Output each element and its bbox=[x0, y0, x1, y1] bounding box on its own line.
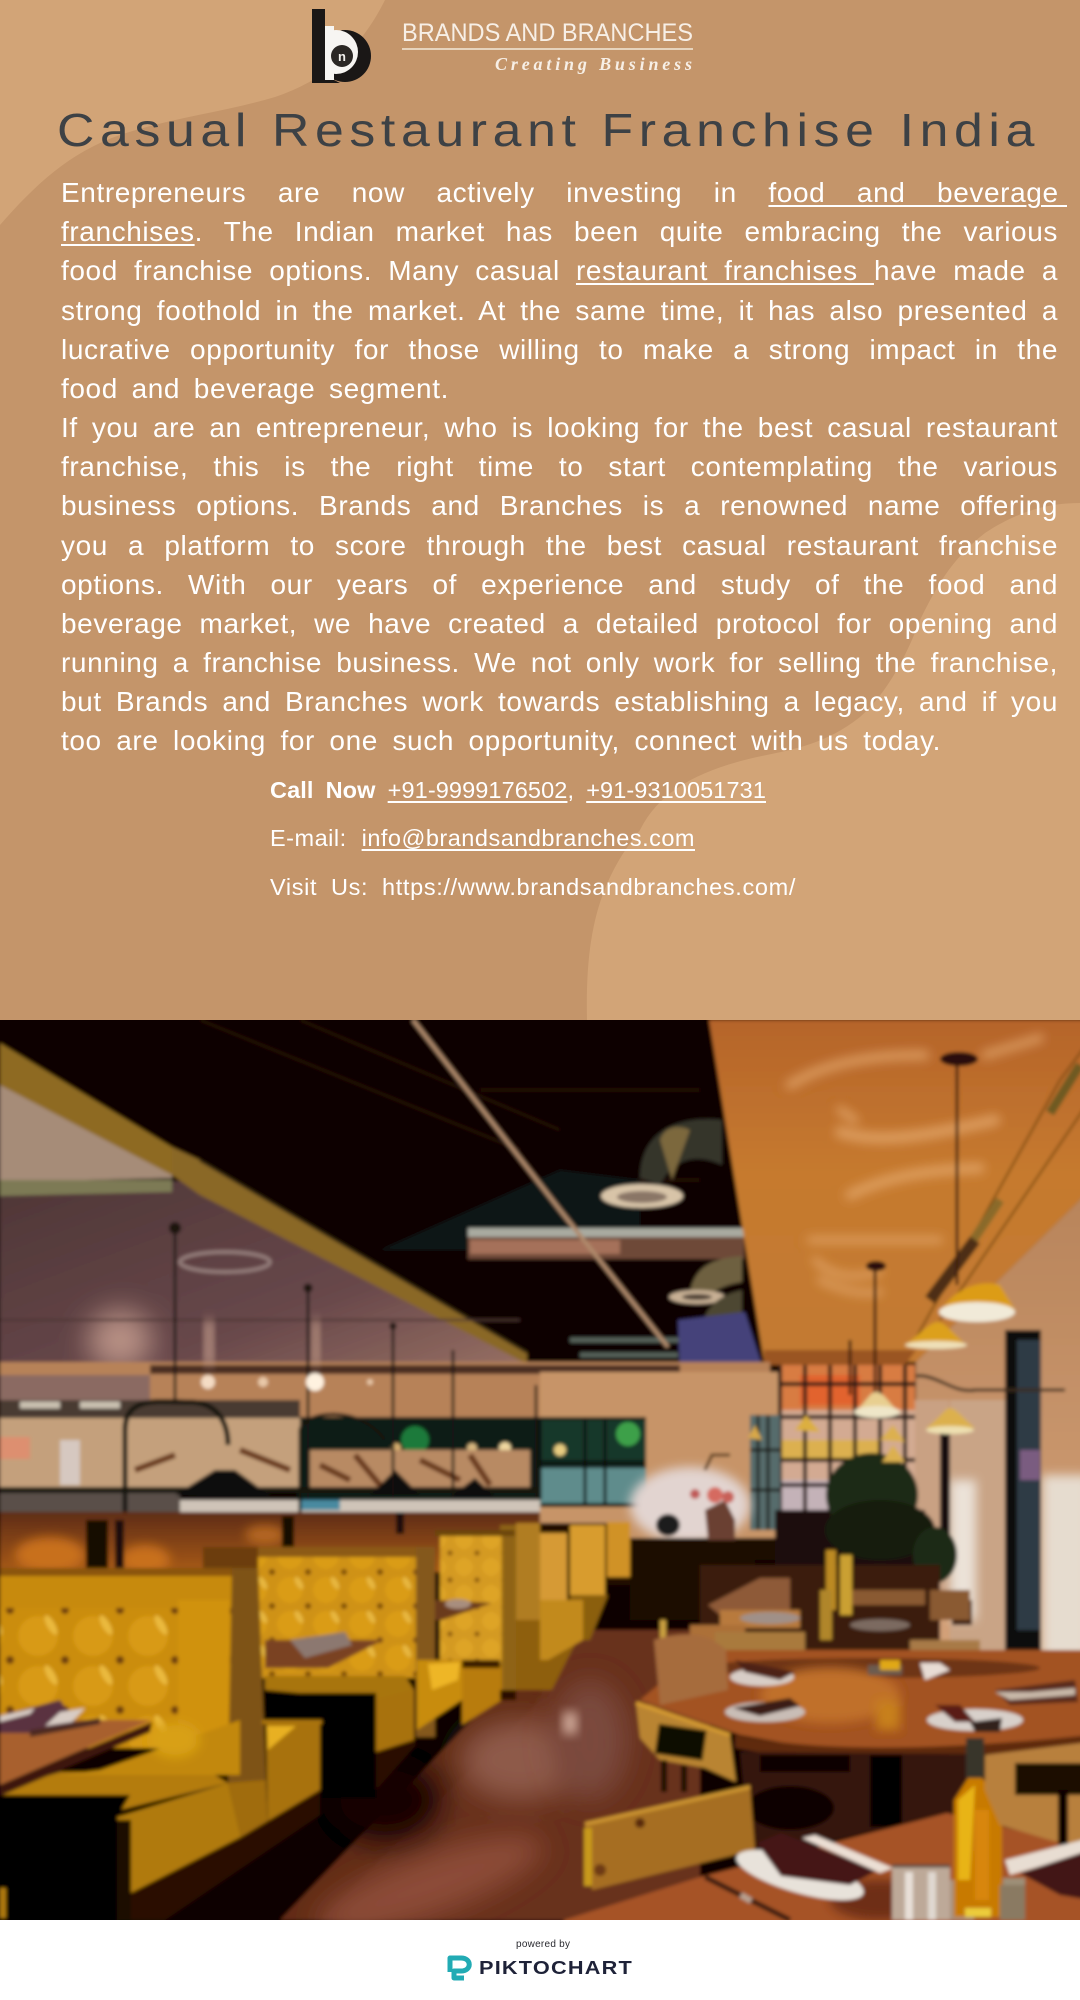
frieze: mural behind the booths bbox=[0, 1400, 540, 1560]
sconces: wall light bbox=[705, 1455, 730, 1470]
booth: second booth bbox=[203, 1547, 462, 1798]
panel: header background bbox=[0, 0, 1080, 1020]
floor bbox=[280, 1630, 740, 1954]
chair: right foreground bbox=[985, 1742, 1080, 1850]
text block: introduction paragraph: franchises. The Indian market has been quite embracing the various bbox=[61, 216, 1058, 247]
ceiling: orange right bbox=[709, 1020, 1080, 1365]
place setting: front plate and napkin bbox=[732, 1833, 893, 1910]
icon: b n monogram: n bbox=[338, 49, 346, 64]
text block: call to action paragraph: beverage market, we have created a detailed protocol for opening and bbox=[61, 608, 1058, 639]
wall: back wall band bbox=[0, 1362, 770, 1422]
contact details: E-mail: info@brandsandbranches.com bbox=[270, 825, 695, 851]
plant: indoor greenery bbox=[775, 1453, 957, 1583]
text block: call to action paragraph: too are looking for one such opportunity, connect with us today. bbox=[61, 725, 941, 756]
beam: diagonal track bbox=[413, 1020, 668, 1347]
booth: far booths bbox=[433, 1522, 630, 1725]
text block: introduction paragraph: Entrepreneurs are now actively investing in food and beverage bbox=[61, 177, 1059, 208]
wood wall: panelling behind the booths bbox=[0, 1512, 540, 1575]
ceiling: black exposed ducts bbox=[200, 1020, 744, 1355]
text block: call to action paragraph: but Brands and Branches work towards establishing a legacy, and if you bbox=[61, 686, 1058, 717]
place setting: right napkin bbox=[1000, 1838, 1080, 1920]
text block: call to action paragraph: business options. Brands and Branches is a renowned name offering bbox=[61, 490, 1058, 521]
window: green-lit middle window bbox=[297, 1417, 646, 1507]
contact details bbox=[270, 777, 796, 900]
chair: side chair left bbox=[636, 1634, 736, 1792]
icon: b n monogram bbox=[312, 9, 371, 83]
text block: introduction paragraph: lucrative opportunity for those willing to make a strong impact in the bbox=[61, 334, 1058, 365]
ceiling: purple soffit bbox=[678, 1312, 764, 1378]
ceiling: mauve left with gold beams bbox=[0, 1043, 527, 1375]
contact details: Call Now +91-9999176502, +91-9310051731 bbox=[270, 777, 766, 803]
text block: introduction paragraph: food franchise options. Many casual restaurant franchises have made a bbox=[61, 255, 1058, 286]
bottle: olive oil bbox=[954, 1738, 1002, 1917]
logo: Brands and Branches bbox=[312, 9, 693, 83]
wall: right cream wall bbox=[905, 1190, 1080, 1700]
wall: rear peach wall bbox=[540, 1372, 780, 1552]
brand name: BRANDS AND BRANCHES bbox=[402, 19, 693, 47]
text block: introduction paragraph: strong foothold in the market. At the same time, it has also presented a bbox=[61, 294, 1058, 326]
tables: rear dining area bbox=[660, 1550, 980, 1672]
table: round table with place settings bbox=[640, 1650, 1080, 1763]
table: front-left table bbox=[0, 1700, 152, 1796]
text block: call to action paragraph: franchise, this is the right time to start contemplating the various bbox=[61, 451, 1058, 482]
text block: call to action paragraph: you a platform to score through the best casual restaurant franchise bbox=[61, 530, 1058, 560]
text block: call to action paragraph bbox=[61, 412, 1058, 756]
text block: introduction paragraph bbox=[61, 177, 1067, 404]
text block: call to action paragraph: If you are an entrepreneur, who is looking for the best casual restaurant bbox=[61, 412, 1058, 443]
contact details: Visit Us: https://www.brandsandbranches.com/ bbox=[270, 874, 796, 900]
window: large grid window bbox=[750, 1365, 915, 1530]
title: Casual Restaurant Franchise India bbox=[57, 104, 1040, 156]
tagline: Creating Business bbox=[495, 54, 692, 74]
footer: powered by Piktochart bbox=[448, 1939, 633, 1980]
powered by label: powered by bbox=[516, 1939, 570, 1950]
chair: large front chair bbox=[584, 1785, 755, 1890]
lamps: left pendant stems and spots bbox=[169, 1222, 536, 1500]
text block: call to action paragraph: options. With our years of experience and study of the food and bbox=[61, 569, 1058, 600]
lamps: yellow pendant shades bbox=[748, 1052, 1015, 1462]
glassware: front salt and pepper bbox=[892, 1866, 1025, 1920]
text block: call to action paragraph: running a franchise business. We not only work for selling the franchise, bbox=[61, 647, 1058, 678]
dark under round table bbox=[740, 1752, 1080, 1860]
booth: front booth bbox=[0, 1568, 322, 1920]
table: front right table bbox=[564, 1813, 1080, 1930]
photo: restaurant interior bbox=[0, 1020, 1080, 1920]
text block: introduction paragraph: food and beverage segment. bbox=[61, 373, 449, 404]
Piktochart wordmark: PIKTOCHART bbox=[479, 1958, 633, 1978]
icon: Piktochart mark bbox=[450, 1958, 469, 1978]
furniture: rear sideboard and flowers bbox=[630, 1467, 775, 1620]
